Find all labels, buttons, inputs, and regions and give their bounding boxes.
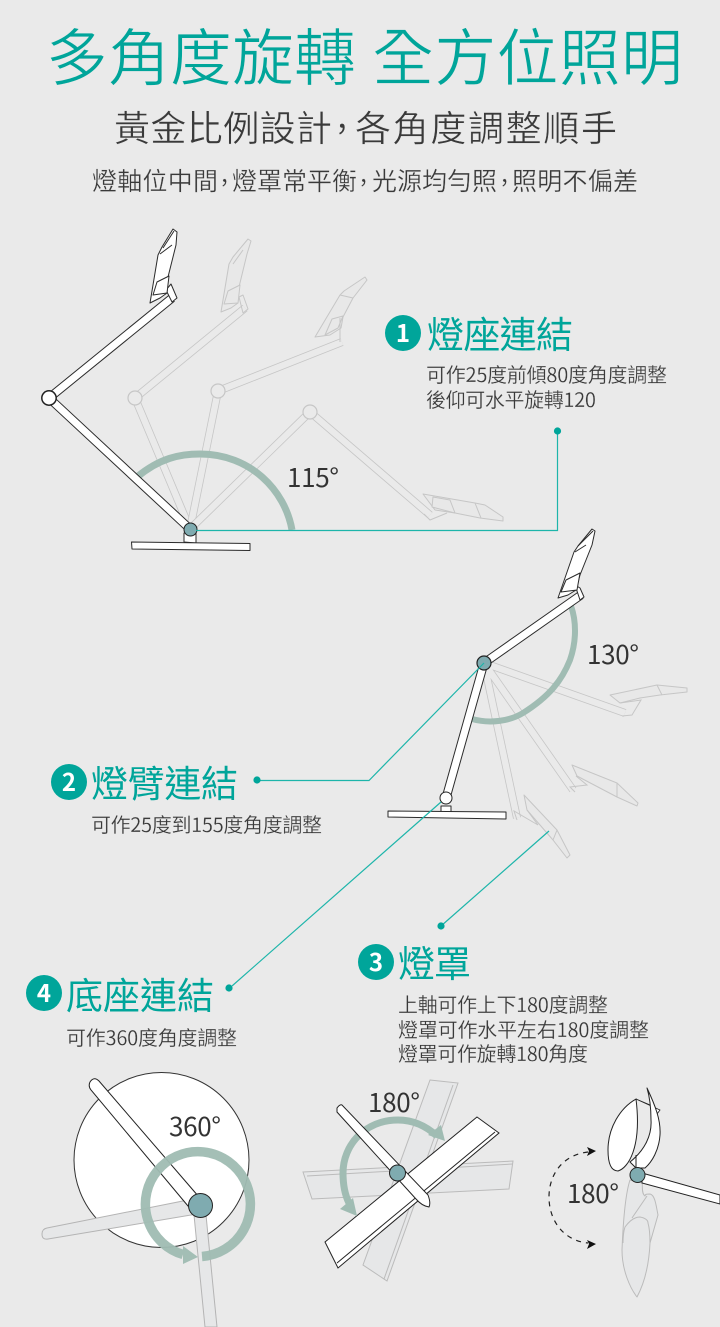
faded shade horizontal <box>303 1161 513 1199</box>
active lamp arm <box>440 595 581 804</box>
faded shade lower <box>622 1180 658 1297</box>
heading 4: 底座連結 <box>66 966 214 1020</box>
description 3: 上軸可作上下180度調整 <box>398 989 608 1018</box>
diagram: arm joint rotation lamp <box>388 529 687 858</box>
title <box>46 8 683 98</box>
description 1: 後仰可水平旋轉120 <box>426 384 596 413</box>
active lamp arm <box>42 298 190 529</box>
title: 多角度旋轉 <box>46 8 356 98</box>
description 3: 燈罩可作水平左右180度調整 <box>398 1014 649 1043</box>
number badge 4: 4 <box>37 974 51 1009</box>
callout line 3 <box>441 831 549 926</box>
callout line 2 <box>260 663 484 780</box>
description 1: 可作25度前傾80度角度調整 <box>426 359 667 388</box>
faded lamp position C <box>190 405 503 529</box>
tagline: , <box>360 154 367 190</box>
section 2: arm connection <box>51 754 322 838</box>
callout dot 2 <box>253 776 261 784</box>
round base <box>74 1072 249 1248</box>
rotation arrow 360 <box>145 1152 250 1264</box>
heading 3: 燈罩 <box>398 934 471 988</box>
lamp base <box>132 533 250 550</box>
diagram: base joint rotation lamp <box>42 229 503 550</box>
heading 1: 燈座連結 <box>427 305 573 359</box>
faded lamp position A <box>128 239 251 529</box>
angle label 180: 180° <box>368 1083 420 1120</box>
faded arm down <box>194 1215 217 1327</box>
pivot joint <box>390 1165 406 1181</box>
base pivot joint <box>184 523 197 536</box>
tagline: 燈罩常平衡 <box>232 162 357 198</box>
number badge 1: 1 <box>396 314 410 349</box>
description 4: 可作360度角度調整 <box>66 1022 237 1051</box>
tagline: 光源均勻照 <box>372 162 497 198</box>
callout line 4 <box>232 802 441 986</box>
section 4: base rotation <box>26 966 237 1051</box>
pivot joint <box>188 1194 212 1218</box>
dashed rotation arrow <box>549 1147 596 1249</box>
faded arm positions and heads <box>484 663 687 858</box>
tagline: 燈軸位中間 <box>92 162 218 198</box>
tagline: 照明不偏差 <box>512 162 638 198</box>
subtitle <box>114 87 617 152</box>
lamp base <box>388 806 506 819</box>
description 1 <box>426 359 667 413</box>
rotation arrow 180 <box>340 1120 445 1216</box>
active lamp head <box>150 229 177 303</box>
description 2: 可作25度到155度角度調整 <box>91 809 322 838</box>
tagline: , <box>501 154 508 190</box>
heading 2: 燈臂連結 <box>91 754 238 808</box>
angle arc 130 <box>472 606 575 721</box>
subtitle: 各角度調整順手 <box>355 100 617 152</box>
section 3: lamp shade <box>358 934 649 1067</box>
number badge 4 <box>26 974 62 1011</box>
tagline <box>92 154 638 198</box>
number badge 2 <box>51 763 87 800</box>
faded shade vertical <box>363 1080 458 1281</box>
active shade <box>325 1117 499 1268</box>
section 1: base connection <box>385 305 667 413</box>
number badge 3 <box>358 943 394 980</box>
angle label 115: 115° <box>287 458 339 495</box>
angle arc 115 <box>137 454 292 530</box>
active arm <box>642 1173 720 1204</box>
subtitle: 黃金比例設計 <box>114 100 332 152</box>
title: 全方位照明 <box>372 8 683 98</box>
angle label 360: 360° <box>169 1107 221 1144</box>
angle label 180: 180° <box>567 1174 619 1211</box>
callout dot 4 <box>225 984 233 992</box>
diagram: 360 degree rotation top view <box>42 1072 250 1327</box>
diagram: shade vertical rotation <box>549 1088 720 1297</box>
angle label 130: 130° <box>587 635 639 672</box>
number badge 1 <box>385 314 421 351</box>
active shade upper <box>608 1088 660 1171</box>
description 3: 燈罩可作旋轉180角度 <box>398 1038 588 1067</box>
faded lamp position B <box>190 277 367 529</box>
callout dot 3 <box>437 922 445 930</box>
callout dot 1 <box>554 427 561 435</box>
description 3 <box>398 989 649 1067</box>
active arm <box>89 1079 199 1206</box>
number badge 3: 3 <box>369 943 383 978</box>
faded arm left <box>42 1198 203 1239</box>
active lamp head <box>558 529 595 600</box>
diagram: shade horizontal rotation <box>303 1080 513 1281</box>
active arm <box>337 1105 430 1207</box>
number badge 2: 2 <box>62 763 76 798</box>
subtitle: , <box>337 87 347 139</box>
tagline: , <box>221 154 228 190</box>
pivot joint <box>630 1168 645 1182</box>
callout line 1 <box>196 431 558 530</box>
